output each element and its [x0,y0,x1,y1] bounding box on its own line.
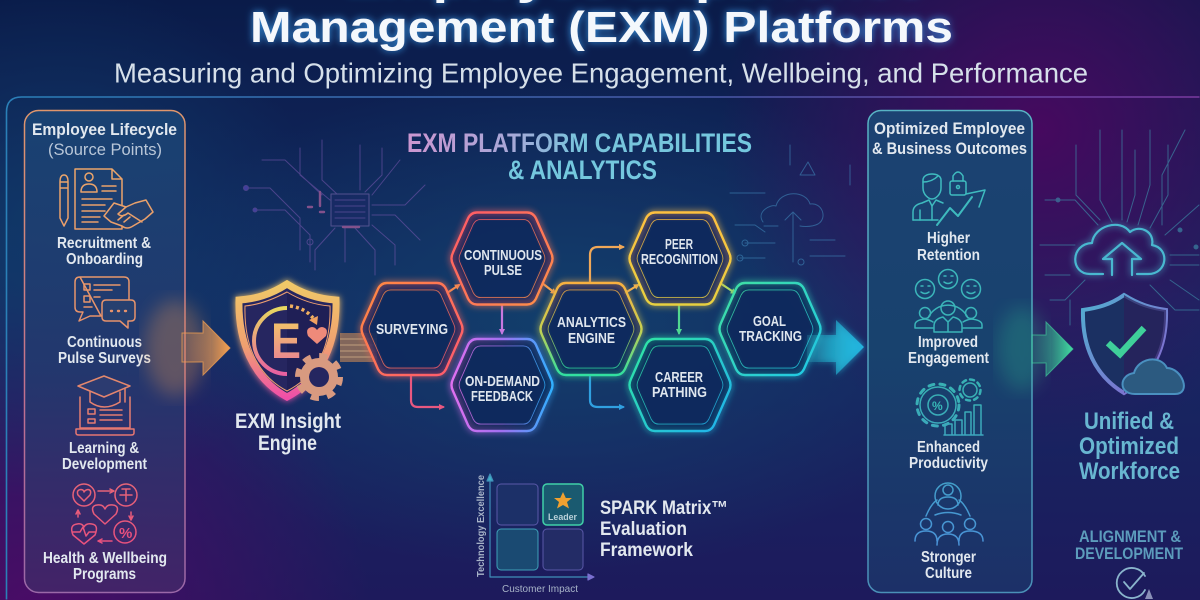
label: productivity: Productivity [909,455,988,472]
label: EXM insight engine: Engine [258,432,317,455]
hexagon: goal tracking: GOAL [753,313,786,330]
icon: engagement [915,270,982,332]
hexagon: analytics engine [540,283,642,375]
label: engagement [908,334,989,367]
heading: platform capabilities: & ANALYTICS [508,155,657,185]
label: retention: Retention [917,247,980,264]
heading: platform capabilities: EXM PLATFORM CAPABILITIES [407,128,752,158]
matrix cell: bottom left [497,529,538,570]
matrix cell: bottom right [543,529,583,570]
label: alignment and development: ALIGNMENT & [1079,528,1181,546]
matrix cell: top left [497,484,538,525]
icon: learning [76,376,134,435]
icon: cloud upload [1075,225,1164,275]
title: Management (EXM) Platforms [250,3,953,52]
panel: employee lifecycle [24,110,185,592]
label: productivity [909,439,988,472]
small cloud [1122,359,1184,394]
arrow: lifecycle to engine [145,300,230,396]
label: pulse surveys: Continuous [67,334,142,351]
label: culture: Culture [925,565,972,582]
label: wellbeing [43,550,167,583]
label: engagement: Engagement [908,350,989,367]
label: productivity: Enhanced [917,439,980,456]
heading: outcomes: Optimized Employee [874,120,1025,138]
SPARK matrix chart [475,474,594,595]
label: SPARK matrix framework: Framework [600,540,693,561]
heading: outcomes [872,120,1027,158]
hexagon: surveying [362,283,462,375]
hexagon: on-demand feedback [452,339,552,431]
heading: outcomes: & Business Outcomes [872,140,1027,158]
circuit decoration right of hexagons [730,145,850,265]
panel: outcomes [868,110,1032,592]
hexagon: continuous pulse: PULSE [484,262,522,279]
label: SPARK matrix framework [600,498,728,561]
hexagon: continuous pulse: CONTINUOUS [464,247,542,264]
connectors between capabilities [411,247,735,407]
label: EXM insight engine: EXM Insight [235,410,341,433]
icon: EXM insight shield [239,284,340,398]
icon: wellbeing [72,484,137,544]
circuit decoration left [244,140,425,275]
hexagon: goal tracking [720,283,820,375]
label: SPARK matrix framework: SPARK Matrix™ [600,498,728,519]
label: pulse surveys: Pulse Surveys [58,350,151,367]
label: recruitment: Onboarding [66,251,143,268]
hexagon: surveying: SURVEYING [376,321,448,338]
hexagon: peer recognition: PEER [665,236,693,253]
icon: productivity [917,380,983,435]
label: learning: Development [62,456,147,473]
hexagon: peer recognition: RECOGNITION [641,251,718,268]
hexagon: career pathing: CAREER [655,369,703,386]
label: retention: Higher [927,230,970,247]
label: wellbeing: Health & Wellbeing [43,550,167,567]
arrow: outcomes to workforce [998,307,1073,391]
label: learning: Learning & [69,440,139,457]
leader label: Leader [548,512,577,522]
hexagon: on-demand feedback: FEEDBACK [471,388,533,405]
star icon [554,492,572,508]
heading: employee lifecycle: Employee Lifecycle [32,120,177,139]
label: SPARK matrix framework: Evaluation [600,519,687,540]
arrow: capabilities to outcomes [807,320,864,375]
icon: retention [913,172,985,225]
label: unified workforce: Optimized [1079,433,1179,460]
label: culture: Stronger [921,549,976,566]
axis label: customer impact: Customer Impact [502,583,578,595]
circuit decoration right [1040,130,1199,325]
icon: recruitment [60,169,153,229]
label: recruitment [57,235,151,268]
letter E: E [271,313,301,369]
label: unified workforce: Unified & [1084,408,1174,435]
label: alignment and development [1075,528,1183,563]
label: learning [62,440,147,473]
hexagon: peer recognition [630,212,730,304]
label: recruitment: Recruitment & [57,235,151,252]
axis label: technology excellence: Technology Excellence [475,475,487,577]
hexagon: analytics engine: ENGINE [568,330,615,347]
label: engagement: Improved [918,334,978,351]
hexagon: on-demand feedback: ON-DEMAND [465,373,540,390]
icon: culture [915,483,983,545]
percent sign: % [932,399,943,413]
hexagon: analytics engine: ANALYTICS [557,314,626,331]
matrix axes [487,474,594,580]
gear [298,356,340,398]
arrow: engine to surveying [340,333,377,362]
hexagon: continuous pulse [452,212,552,304]
label: alignment and development: DEVELOPMENT [1075,545,1183,563]
percent sign: % [119,525,132,542]
icon: pulse surveys [75,277,135,328]
label: culture [921,549,976,582]
heart [307,327,327,344]
label: unified workforce [1079,408,1180,485]
heading: platform capabilities [407,128,752,185]
hexagon: goal tracking: TRACKING [739,328,802,345]
icon: alignment check [1117,568,1153,599]
subheading: source points: (Source Points) [48,140,162,159]
icon: shield check [1083,295,1184,394]
label: unified workforce: Workforce [1079,458,1180,485]
hexagon: career pathing: PATHING [652,384,707,401]
hexagon: career pathing [630,339,730,431]
label: pulse surveys [58,334,151,367]
subtitle: Measuring and Optimizing Employee Engagement, Wellbeing, and Performance [114,58,1088,88]
label: retention [917,230,980,264]
label: EXM insight engine [235,410,341,455]
label: wellbeing: Programs [73,566,136,583]
